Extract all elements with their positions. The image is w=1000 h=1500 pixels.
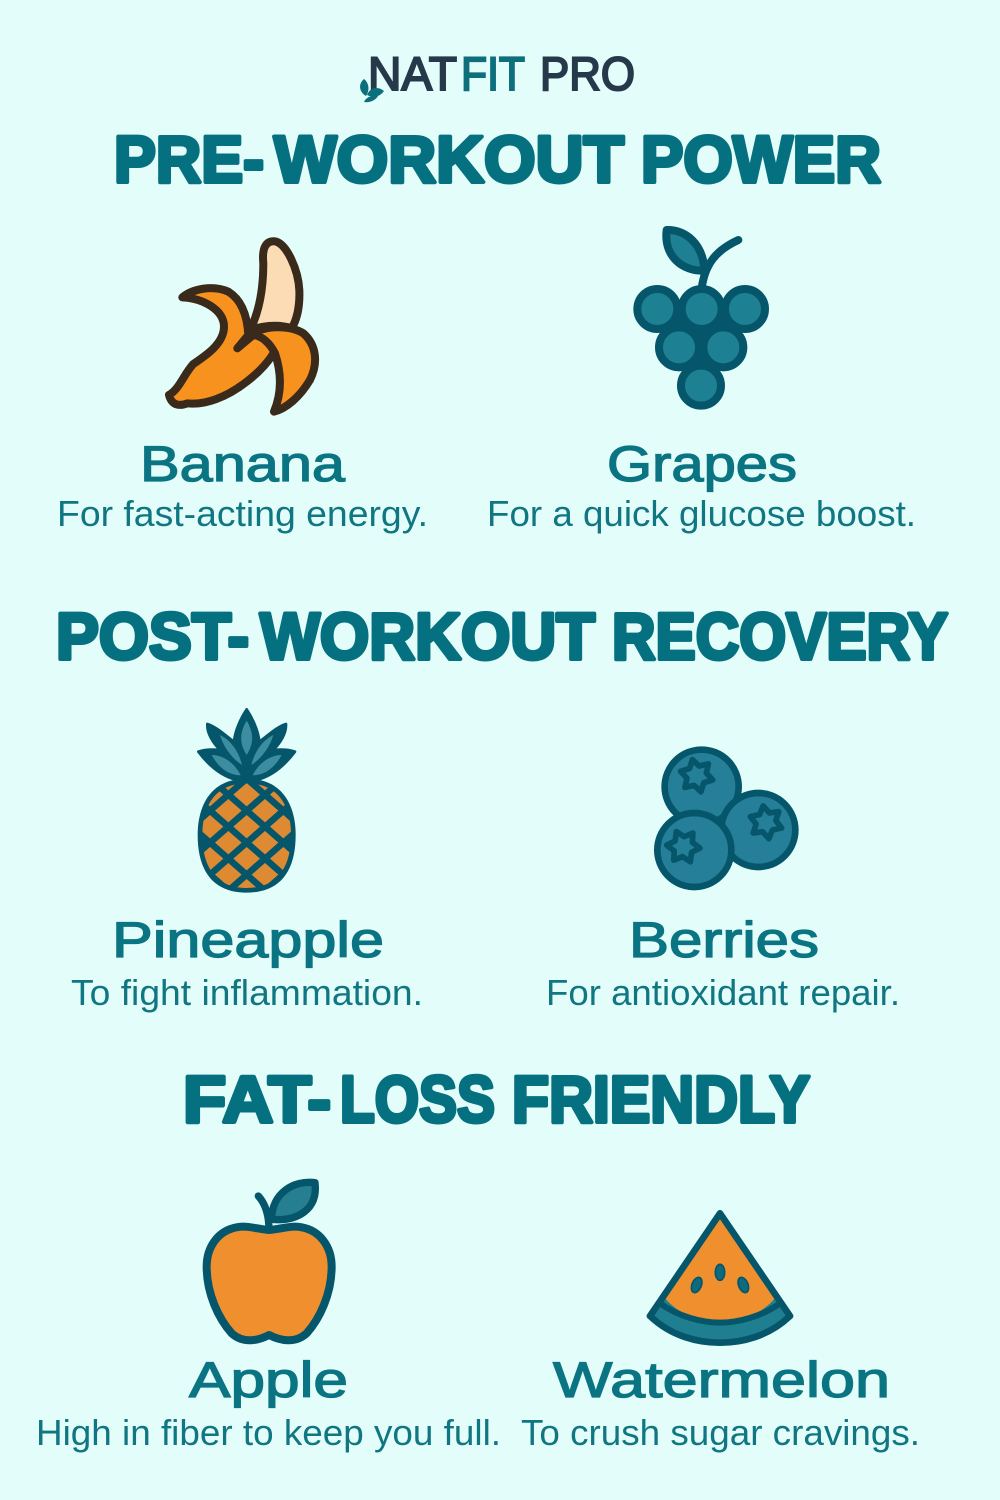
description: watermelon: To crush sugar cravings. (521, 1412, 920, 1453)
panel: berries (546, 750, 900, 1013)
logo: Natfit Pro (360, 47, 635, 102)
logo: Natfit Pro: NAT (368, 47, 457, 100)
label: berries: Berries (629, 912, 819, 968)
heading: pre-workout power: POWER (641, 122, 881, 196)
icon: berries (657, 750, 795, 887)
heading: post-workout recovery: RECOVERY (612, 599, 948, 673)
icon: apple (207, 1182, 332, 1340)
heading: post-workout recovery: POST- (56, 599, 249, 673)
label: watermelon: Watermelon (553, 1352, 890, 1408)
logo: Natfit Pro: PRO (540, 47, 635, 100)
icon: banana (169, 241, 315, 412)
heading: pre-workout power: WORKOUT (274, 122, 624, 196)
label: banana: Banana (140, 436, 345, 492)
heading: fat-loss friendly (183, 1062, 810, 1136)
heading: fat-loss friendly: LOSS (340, 1062, 495, 1136)
panel: grapes (487, 230, 916, 534)
panel: apple (36, 1182, 501, 1453)
heading: pre-workout power: PRE- (114, 122, 264, 196)
icon: grapes (637, 230, 765, 406)
heading: fat-loss friendly: FRIENDLY (512, 1062, 810, 1136)
panel: banana (57, 241, 428, 534)
heading: pre-workout power (114, 122, 881, 196)
logo: Natfit Pro: FIT (461, 47, 525, 100)
panel: watermelon (521, 1213, 920, 1453)
label: pineapple: Pineapple (112, 912, 384, 968)
description: grapes: For a quick glucose boost. (487, 493, 916, 534)
description: berries: For antioxidant repair. (546, 972, 900, 1013)
label: apple: Apple (189, 1352, 348, 1408)
description: apple: High in fiber to keep you full. (36, 1412, 501, 1453)
description: pineapple: To fight inflammation. (71, 972, 423, 1013)
heading: post-workout recovery (56, 599, 948, 673)
icon: watermelon (650, 1213, 790, 1343)
label: grapes: Grapes (607, 436, 797, 492)
description: banana: For fast-acting energy. (57, 493, 428, 534)
icon: pineapple (197, 709, 297, 902)
heading: fat-loss friendly: FAT- (183, 1062, 331, 1136)
heading: post-workout recovery: WORKOUT (260, 599, 595, 673)
panel: pineapple (71, 709, 423, 1013)
